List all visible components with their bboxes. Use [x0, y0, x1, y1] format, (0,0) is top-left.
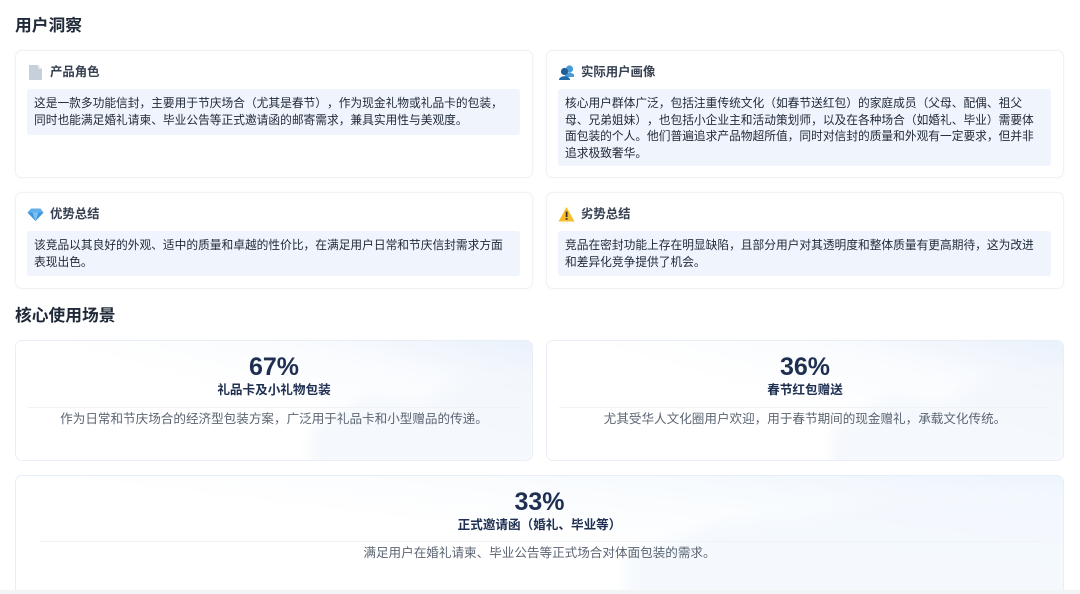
description: spring festival red envelope: 尤其受华人文化圈用户欢迎，用于春节期间的现金赠礼，承载文化传统。 — [604, 412, 1006, 426]
card title: weaknesses summary: 劣势总结 — [581, 207, 631, 221]
panel: scenario gift cards — [15, 340, 533, 461]
icon: diamond — [28, 208, 44, 221]
text block: actual user persona: 核心用户群体广泛，包括注重传统文化（如春节送红包）的家庭成员（父母、配偶、祖父 — [565, 97, 1022, 110]
heading: user insights: 用户洞察 — [15, 16, 82, 35]
card title: product role: 产品角色 — [50, 65, 100, 79]
text block: actual user persona: 面包装的个人。他们普遍追求产品物超所值，同时对信封的质量和外观有一定要求，但并非 — [565, 130, 1034, 143]
text block: strengths summary: 该竞品以其良好的外观、适中的质量和卓越的性价比，在满足用户日常和节庆信封需求方面 — [34, 239, 503, 252]
text block: weaknesses summary: 和差异化竞争提供了机会。 — [565, 256, 706, 268]
panel: product role — [15, 50, 533, 178]
description: gift card packaging: 作为日常和节庆场合的经济型包装方案，广泛用于礼品卡和小型赠品的传递。 — [60, 412, 488, 426]
card title: actual user persona: 实际用户画像 — [581, 65, 655, 79]
stat: 67%: 67% — [249, 353, 299, 381]
icon: document — [29, 65, 42, 80]
text block: strengths summary — [27, 231, 520, 276]
icon: warning — [558, 207, 574, 222]
text block: strengths summary: 表现出色。 — [34, 256, 93, 268]
panel: actual user persona — [546, 50, 1064, 178]
stat: 33%: 33% — [514, 488, 565, 516]
label: spring festival red envelope: 春节红包赠送 — [767, 383, 843, 397]
label: formal invitations: 正式邀请函（婚礼、毕业等） — [458, 518, 621, 532]
text block: product role: 这是一款多功能信封，主要用于节庆场合（尤其是春节），作为现金礼物或礼品卡的包装， — [34, 97, 503, 110]
text block: weaknesses summary: 竞品在密封功能上存在明显缺陷，且部分用户对其透明度和整体质量有更高期待，这为改进 — [565, 239, 1034, 252]
description: formal invitations: 满足用户在婚礼请柬、毕业公告等正式场合对体面包装的需求。 — [363, 546, 716, 560]
stat: 36%: 36% — [780, 353, 830, 381]
text block: actual user persona: 母、兄弟姐妹），也包括小企业主和活动策划师，以及在各种场合（如婚礼、毕业）需要体 — [565, 114, 1034, 126]
heading: core usage scenarios: 核心使用场景 — [15, 306, 116, 325]
icon: users — [559, 65, 574, 80]
text block: product role — [27, 89, 520, 135]
text block: actual user persona — [558, 89, 1051, 166]
label: gift card packaging: 礼品卡及小礼物包装 — [217, 383, 331, 397]
text block: product role: 同时也能满足婚礼请柬、毕业公告等正式邀请函的邮寄需求，兼具实用性与美观度。 — [34, 114, 468, 126]
text block: actual user persona: 追求极致奢华。 — [565, 146, 647, 160]
card title: strengths summary: 优势总结 — [50, 207, 100, 221]
panel: strengths summary — [15, 192, 533, 289]
text block: weaknesses summary — [558, 231, 1051, 276]
panel: scenario formal invitations — [15, 475, 1064, 594]
panel: weaknesses summary — [546, 192, 1064, 289]
panel: scenario red envelope — [546, 340, 1064, 461]
